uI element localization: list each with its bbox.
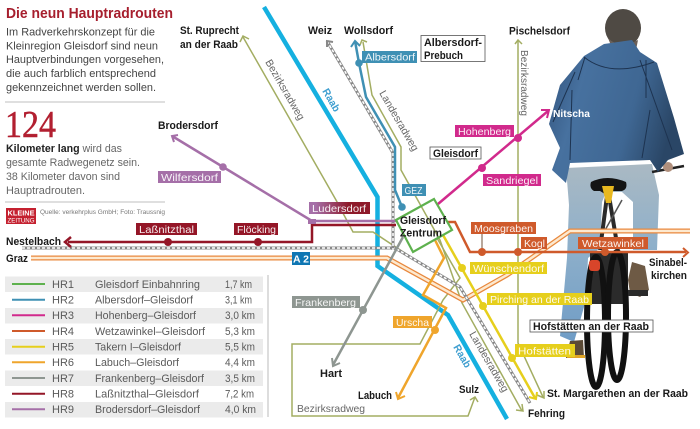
place names: Labuch xyxy=(358,390,392,402)
path and river name labels: Landesradweg xyxy=(466,330,511,395)
row HR3: HR3 xyxy=(52,310,74,322)
boxed place: Hofstätten an der Raab: Hofstätten an der Raab xyxy=(533,321,649,333)
boxed place: Gleisdorf: Gleisdorf xyxy=(433,148,478,160)
row HR6: 4,4 km xyxy=(225,357,255,369)
handlebar and hand xyxy=(652,166,684,172)
row HR9: HR9 xyxy=(52,404,74,416)
row HR4: Wetzawinkel–Gleisdorf xyxy=(95,326,206,338)
place names: Wollsdorf xyxy=(344,25,393,37)
logo: Kleine Zeitung: KLEINE xyxy=(8,210,35,218)
place names: kirchen xyxy=(651,270,687,282)
route HR4 rust orange: Wetzawinkel xyxy=(582,238,644,250)
place names: Sulz xyxy=(459,384,479,396)
place names: St. Margarethen an der Raab xyxy=(547,388,688,400)
row HR9: Brodersdorf–Gleisdorf xyxy=(95,404,201,416)
key figure: 124 kilometres: gesamte Radwegenetz sein. xyxy=(6,157,140,169)
path and river name labels: Landesradweg xyxy=(376,88,421,154)
path and river name labels xyxy=(262,50,530,415)
logo: Kleine Zeitung: ZEITUNG xyxy=(8,218,35,224)
route HR5 yellow: Hofstätten xyxy=(518,346,571,358)
route HR5 yellow xyxy=(443,235,592,399)
intro text: Kleinregion Gleisdorf sind neun xyxy=(6,40,158,52)
route HR3 magenta: Sandriegel xyxy=(486,175,538,187)
route HR2 blue: GEZ xyxy=(404,185,423,197)
row HR1: HR1 xyxy=(52,279,74,291)
place names: Pischelsdorf xyxy=(509,26,570,38)
intro text: Hauptverbindungen vorgesehen, xyxy=(6,54,164,66)
route legend table xyxy=(5,275,268,418)
route HR2 blue: Albersdorf xyxy=(365,52,415,64)
route HR4 rust orange: Moosgraben xyxy=(474,223,533,235)
saddle xyxy=(590,178,626,196)
row HR3: Hohenberg–Gleisdorf xyxy=(95,310,197,322)
logo: Kleine Zeitung xyxy=(6,208,36,224)
row HR1: Gleisdorf Einbahnring xyxy=(95,279,200,291)
route HR4 rust orange: Kogl xyxy=(524,238,545,250)
row HR8: 7,2 km xyxy=(225,388,254,400)
title: Die neun Hauptradrouten xyxy=(6,5,173,22)
place names: Brodersdorf xyxy=(158,120,218,132)
photo: cyclist from behind xyxy=(549,9,684,387)
row HR7: Frankenberg–Gleisdorf xyxy=(95,373,205,385)
place names: Gleisdorf xyxy=(400,215,446,227)
road: A2 motorway xyxy=(31,231,690,300)
boxed place: Albersdorf-Prebuch xyxy=(421,36,485,62)
place names: Fehring xyxy=(528,408,565,420)
row HR9: 4,0 km xyxy=(225,404,256,416)
route HR8 dark red: Ludersdorf xyxy=(312,203,366,215)
place names: Sinabel- xyxy=(649,257,687,269)
row HR1 xyxy=(12,279,252,291)
route HR6 orange xyxy=(393,240,446,399)
place names: an der Raab xyxy=(180,39,238,51)
route HR3 magenta: Hohenberg xyxy=(458,126,511,138)
left shoe xyxy=(566,340,584,358)
road: dashed grey main roads xyxy=(22,41,530,403)
route HR2 blue xyxy=(351,41,426,211)
boxed place: Albersdorf-Prebuch: Albersdorf- xyxy=(424,37,482,49)
row HR6 xyxy=(12,357,255,369)
route HR9 purple: Wilfersdorf xyxy=(161,172,218,184)
route HR7 grey xyxy=(292,237,403,366)
source note: Quelle: verkehrplus GmbH; Foto: Traussnig xyxy=(40,210,165,216)
seat tube in yellow xyxy=(602,186,614,203)
row HR2: HR2 xyxy=(52,294,74,306)
place names: Weiz xyxy=(308,25,332,37)
row HR2: 3,1 km xyxy=(225,294,252,306)
right shoe and pedal xyxy=(628,262,649,297)
route HR5 yellow: Wünschendorf xyxy=(473,263,544,275)
key figure: 124 kilometres: Hauptradrouten. xyxy=(6,185,85,197)
row HR8: HR8 xyxy=(52,388,74,400)
route HR4 rust orange xyxy=(448,222,688,257)
key figure: 124 kilometres xyxy=(5,104,140,197)
rear bike wheels xyxy=(587,196,628,387)
row HR5: 5,5 km xyxy=(225,342,255,354)
route HR8 dark red: Flöcking xyxy=(237,224,276,236)
intro text: die auch farblich entsprechend xyxy=(6,68,156,80)
row HR7: 3,5 km xyxy=(225,373,255,385)
place names: Nestelbach xyxy=(6,236,61,248)
row HR4: 5,3 km xyxy=(225,326,255,338)
key figure: 124 kilometres: Kilometer lang wird das xyxy=(6,143,122,155)
jacket xyxy=(549,40,684,183)
path and river name labels: Raab xyxy=(450,342,473,370)
path and river name labels: Bezirksradweg xyxy=(518,50,530,116)
place names: Zentrum xyxy=(400,228,442,240)
intro text: gekennzeichnet werden sollen. xyxy=(6,82,156,94)
place names: Nitscha xyxy=(553,108,590,120)
row HR9 xyxy=(12,404,256,416)
row HR7 xyxy=(12,373,255,385)
row HR5: Takern I–Gleisdorf xyxy=(95,342,182,354)
route HR8 dark red: Laßnitzthal xyxy=(139,224,194,236)
row HR4 xyxy=(12,326,255,338)
river: Raab xyxy=(264,7,507,419)
row HR4: HR4 xyxy=(52,326,74,338)
route HR8 dark red xyxy=(65,202,396,247)
place names: Hart xyxy=(320,368,342,380)
row HR6: HR6 xyxy=(52,357,74,369)
route HR7 grey: Frankenberg xyxy=(295,297,356,309)
key figure: 124 kilometres: 124 xyxy=(5,104,56,146)
row HR3 xyxy=(12,310,255,322)
road label: A2: A 2 xyxy=(293,254,309,266)
path and river name labels: Raab xyxy=(319,86,342,114)
boxed place: Albersdorf-Prebuch: Prebuch xyxy=(424,50,463,62)
route HR1 green ring xyxy=(396,199,452,252)
legs: jeans xyxy=(560,164,659,342)
row HR8: Laßnitzthal–Gleisdorf xyxy=(95,388,200,400)
bicycle paths: Bezirksradweg and Landesradweg xyxy=(240,36,544,416)
intro text: Im Radverkehrskonzept für die xyxy=(6,26,155,38)
route HR9 purple xyxy=(158,135,396,221)
row HR2: Albersdorf–Gleisdorf xyxy=(95,294,194,306)
key figure: 124 kilometres: 38 Kilometer davon sind xyxy=(6,171,120,183)
place names: St. Ruprecht xyxy=(180,25,239,37)
tail light xyxy=(589,260,600,271)
place names: Graz xyxy=(6,253,28,265)
path and river name labels: Bezirksradweg xyxy=(262,58,307,123)
route HR6 orange: Urscha xyxy=(396,317,429,329)
jacket seams xyxy=(553,57,672,160)
row HR5: HR5 xyxy=(52,342,74,354)
intro text xyxy=(6,26,164,94)
row HR6: Labuch–Gleisdorf xyxy=(95,357,180,369)
path and river name labels: Bezirksradweg xyxy=(297,403,365,415)
route HR5 yellow: Pirching an der Raab xyxy=(490,294,589,306)
row HR8 xyxy=(12,388,254,400)
row HR2 xyxy=(12,294,252,306)
route HR3 magenta xyxy=(438,110,549,204)
row HR7: HR7 xyxy=(52,373,74,385)
row HR5 xyxy=(12,342,255,354)
head xyxy=(605,9,641,47)
row HR1: 1,7 km xyxy=(225,279,252,291)
row HR3: 3,0 km xyxy=(225,310,255,322)
